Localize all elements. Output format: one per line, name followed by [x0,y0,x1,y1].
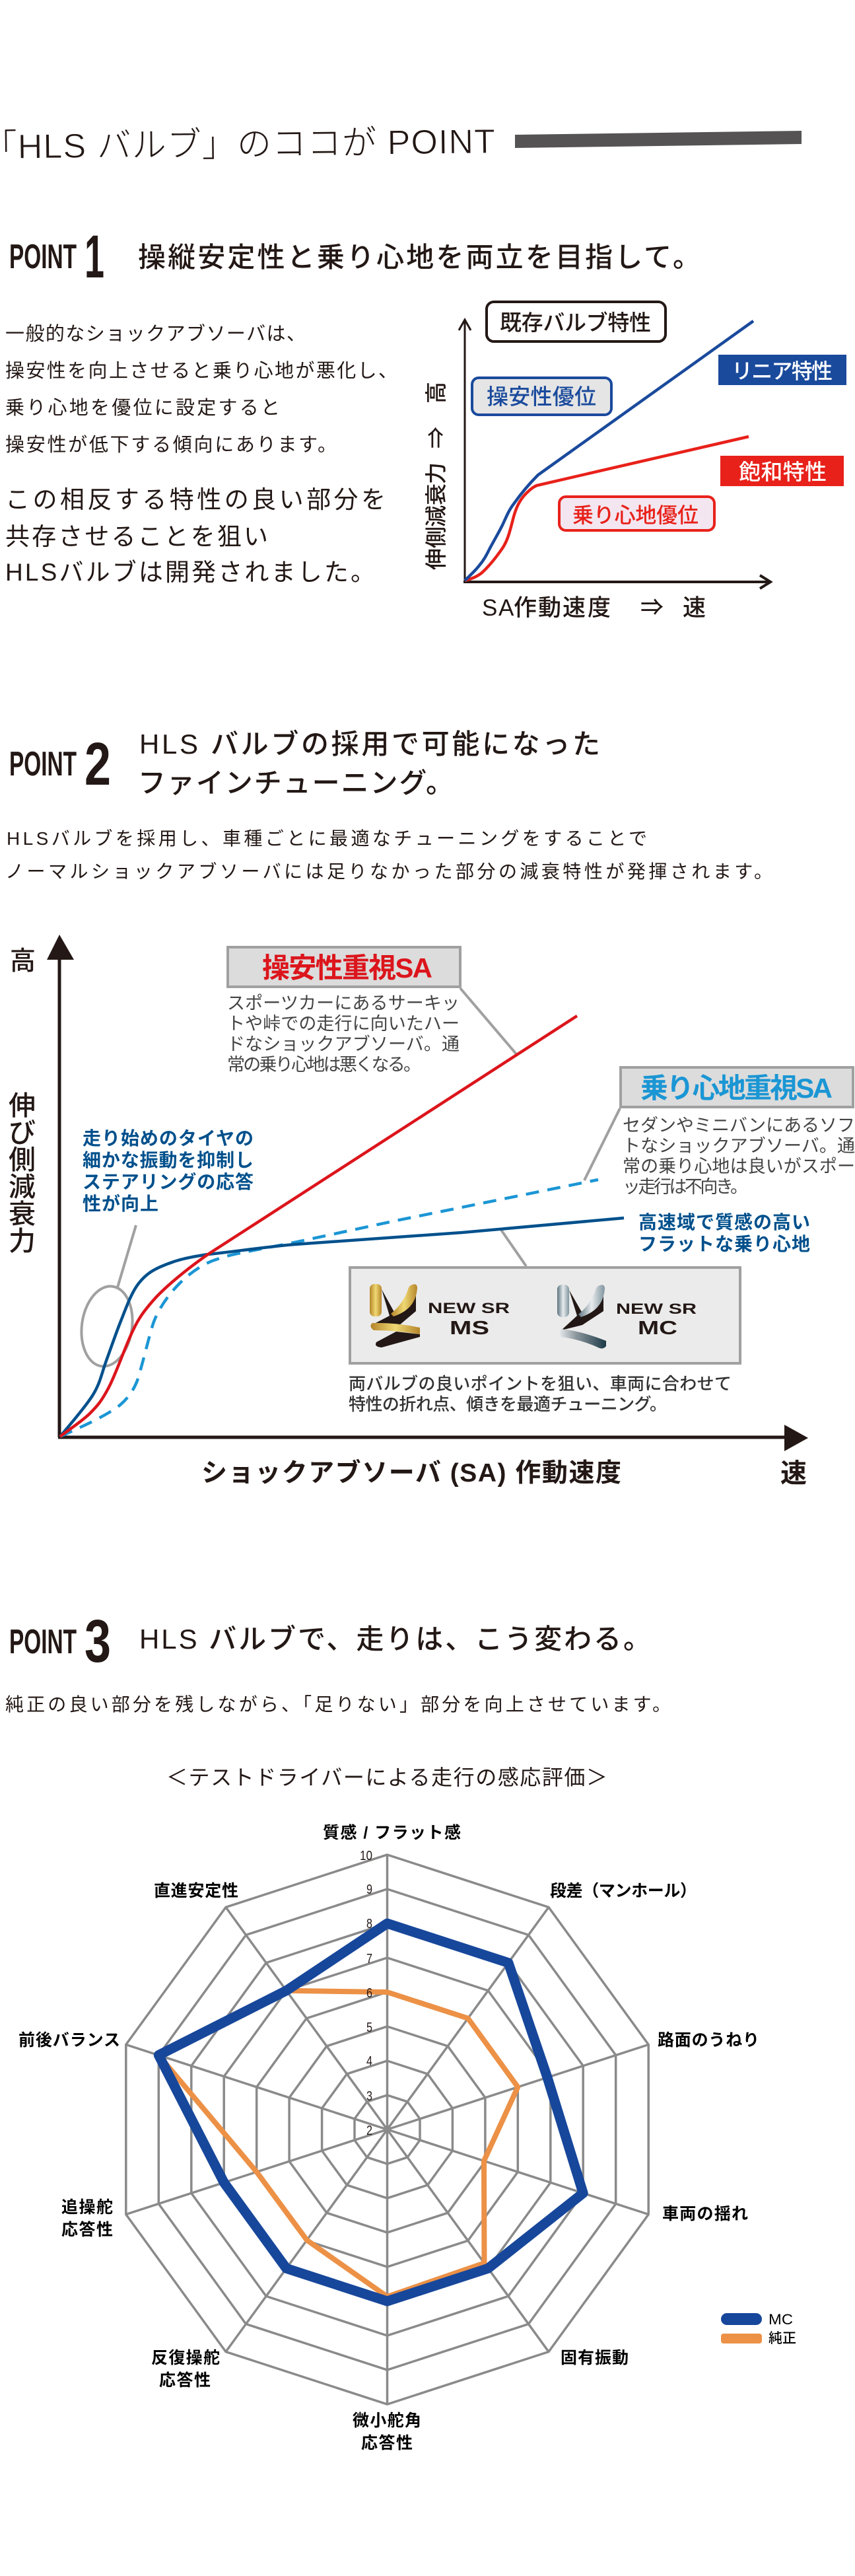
label: new SR MC: MC [638,1318,677,1339]
legend: MC [769,2311,793,2328]
axis labels: 応答性 [61,2221,113,2239]
scale numbers: 7 [366,1952,372,1966]
x axis arrow [463,575,770,589]
icon: MS logo [370,1284,420,1347]
label: new SR MS [428,1300,510,1339]
scale numbers [360,1849,372,2138]
axis labels [18,1824,759,2452]
axis labels: 固有振動 [561,2349,629,2367]
y axis label: 伸側減衰力⇒高 [424,382,448,570]
label: existing valve: 既存バルブ特性 [500,310,651,335]
label: stability [472,378,611,415]
x axis fast label: 速 [780,1459,807,1488]
label: existing valve [487,302,666,341]
axis labels: 反復操舵 [151,2349,220,2367]
text block: stability SA: トや峠での走行に向いたハー [227,1014,460,1034]
y axis high label: 高 [10,947,36,976]
text block: point 2 explanation: HLSバルブを採用し、車種ごとに最適なチューニングをすることで [7,828,647,849]
text block: point 3 explanation: 純正の良い部分を残しながら、「足りない」部分を向上させています。 [5,1694,671,1715]
label: stability: 操安性優位 [487,384,596,409]
heading: point 2 [9,729,600,799]
leader lines [77,988,620,1370]
text block: both valves: 両バルブの良いポイントを狙い、車両に合わせて [349,1374,732,1394]
text block: point 1 conclusion: 共存させることを狙い [5,523,268,550]
axis labels: 追操舵 [61,2198,113,2217]
callout: high speed flat [638,1212,810,1254]
title [0,123,802,166]
axis labels: 直進安定性 [154,1882,238,1900]
scale numbers: 4 [366,2054,372,2069]
heading: point 2: ファインチューニング。 [138,768,454,799]
text block: comfort SA [623,1116,855,1197]
legend: 純正 [769,2331,796,2346]
x axis arrow [58,1436,787,1439]
text block: stability SA [227,993,460,1075]
chart title: ＜テストドライバーによる走行の感応評価＞ [166,1766,607,1789]
axis labels: 前後バランス [18,2031,120,2050]
callout: initial response: 細かな振動を抑制し [83,1150,254,1170]
scale numbers: 8 [366,1917,372,1931]
curve: linear [465,321,753,581]
callout: high speed flat: 高速域で質感の高い [638,1212,810,1233]
text block: comfort SA: 常の乗り心地は良いがスポー [623,1157,855,1176]
text block: point 2 explanation [5,828,772,882]
legend [721,2311,796,2346]
x axis title: ショックアブソーバ (SA) 作動速度 [201,1458,621,1487]
heading: point 3 [9,1608,651,1675]
y axis arrow [459,320,471,582]
heading: point 1: 1 [85,223,104,291]
axis labels: 質感 / フラット感 [323,1824,461,1842]
label: saturated [720,456,844,486]
label: saturated: 飽和特性 [739,460,827,484]
axis labels: 路面のうねり [658,2031,759,2050]
heading: point 3: POINT [9,1623,77,1661]
heading: point 1: 操縦安定性と乗り心地を両立を目指して。 [138,242,701,273]
label: new SR MS: NEW SR [428,1300,510,1316]
label: new SR MC: NEW SR [616,1301,697,1317]
heading: point 1 [9,223,701,291]
chart: damping tuning [9,935,855,1488]
scale numbers: 6 [366,1986,372,2001]
heading: point 2: POINT [9,745,77,783]
text block: both valves: 特性の折れ点、傾きを最適チューニング。 [349,1394,667,1414]
scale numbers: 10 [360,1849,372,1863]
scale numbers: 5 [366,2021,372,2035]
label: new SR MS: MS [450,1318,489,1339]
label: comfort [559,497,714,530]
text block: comfort SA: ッ走行は不向き。 [623,1177,748,1197]
label: comfort: 乗り心地優位 [572,503,699,527]
label: new SR MC [616,1301,697,1339]
curve: saturated [465,437,749,581]
radar chart [18,1824,796,2452]
heading: point 2: HLS バルブの採用で可能になった [139,729,600,760]
text block: comfort SA: トなショックアブソーバ。通 [623,1136,855,1156]
icon: MC logo [557,1285,606,1349]
heading: point 1: POINT [9,238,77,276]
callout: stability SA [228,947,460,987]
curve: flat high speed [60,1218,624,1437]
text block: point 1 explanation [5,323,397,456]
axis labels: 車両の揺れ [662,2205,748,2223]
axis labels: 微小舵角 [353,2412,421,2430]
curve: stability SA [60,1016,577,1437]
y axis title: 伸び側減衰力 [9,1091,36,1256]
text block: point 1 conclusion: HLSバルブは開発されました。 [5,559,375,586]
heading: point 3: HLS バルブで、走りは、こう変わる。 [139,1624,651,1655]
text block: point 1 explanation: 一般的なショックアブソーバは、 [5,323,306,345]
callout: initial response: 性が向上 [83,1193,158,1214]
curve: comfort SA dashed [60,1180,598,1437]
scale numbers: 9 [366,1882,372,1897]
axis labels: 応答性 [159,2371,211,2390]
text block: stability SA: スポーツカーにあるサーキッ [227,993,460,1013]
panel: new SR products [350,1268,740,1363]
label: linear: リニア特性 [732,359,833,383]
chart: existing valve characteristics [424,302,846,621]
text block: comfort SA: セダンやミニバンにあるソフ [623,1116,855,1135]
callout: comfort SA [621,1067,853,1107]
radar grid [126,1855,648,2404]
callout: initial response: 走り始めのタイヤの [83,1128,254,1149]
text block: point 1 conclusion [5,486,386,586]
text block: point 1 conclusion: この相反する特性の良い部分を [5,486,386,513]
callout: initial response: ステアリングの応答 [83,1171,254,1192]
text block: stability SA: 常の乗り心地は悪くなる。 [227,1055,421,1075]
series: stock [158,1991,518,2297]
text block: point 1 explanation: 操安性を向上させると乗り心地が悪化し、 [5,360,397,382]
axis labels: 応答性 [361,2434,413,2452]
heading: point 2: 2 [85,731,111,798]
series: MC [158,1923,583,2301]
y axis arrow [58,958,61,1437]
scale numbers: 2 [366,2124,372,2138]
scale numbers: 3 [366,2089,372,2104]
text block: both valves [349,1374,732,1414]
callout: comfort SA: 乗り心地重視SA [640,1073,833,1104]
axis labels: 段差（マンホール） [550,1882,697,1900]
label: linear [718,355,846,385]
text block: stability SA: ドなショックアブソーバ。通 [227,1034,460,1054]
callout: initial response [83,1128,254,1214]
callout: stability SA: 操安性重視SA [262,952,432,984]
x axis label: SA作動速度⇒速 [482,595,706,621]
text block: point 1 explanation: 操安性が低下する傾向にあります。 [5,434,337,456]
heading: point 3: 3 [85,1608,111,1675]
text block: point 1 explanation: 乗り心地を優位に設定すると [5,397,280,419]
text block: point 2 explanation: ノーマルショックアブソーバには足りなかった部分の減衰特性が発揮されます。 [5,861,772,882]
callout: high speed flat: フラットな乗り心地 [638,1234,810,1254]
